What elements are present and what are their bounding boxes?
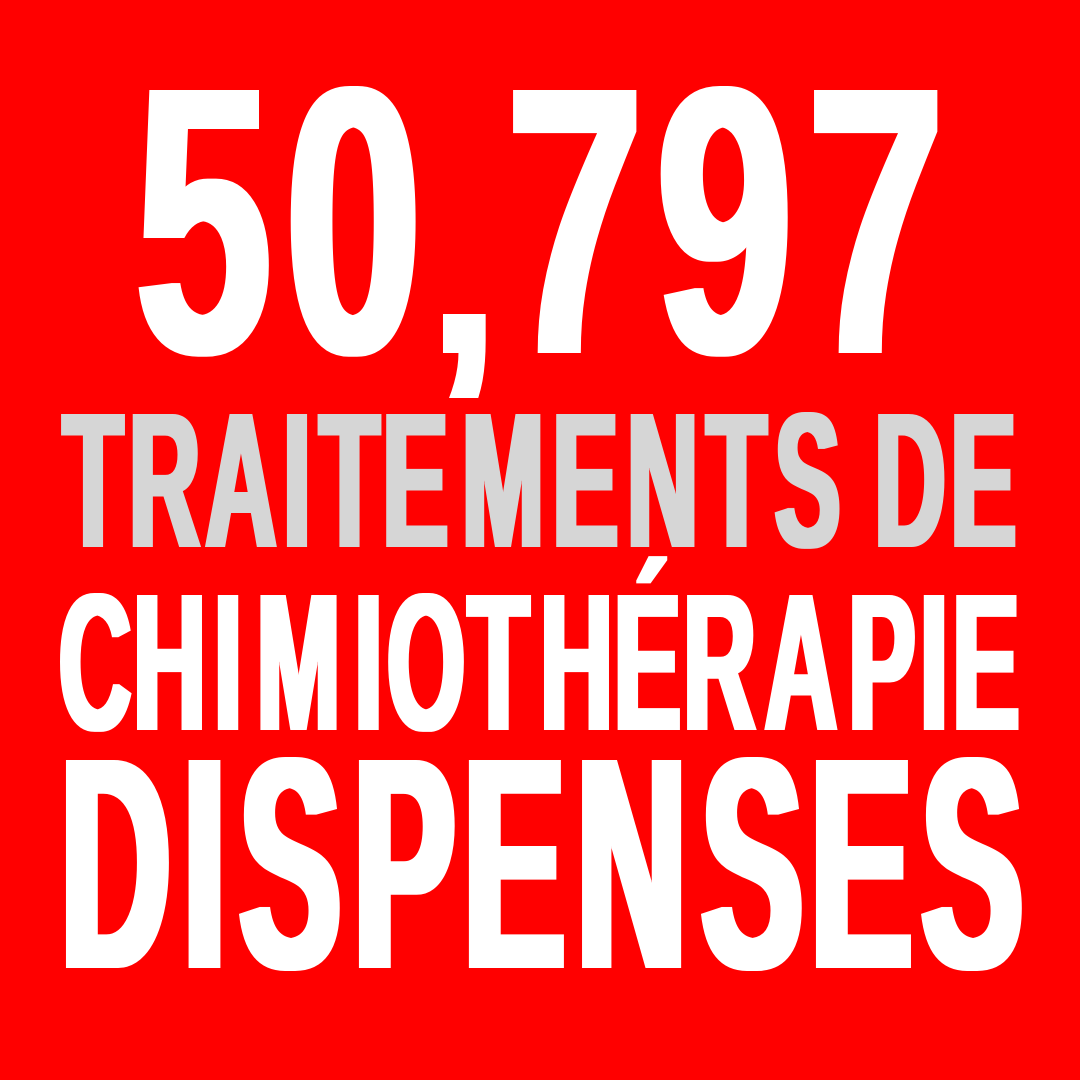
text line: dispenses: DISPENSES xyxy=(61,695,1023,1032)
text line: chimiothérapie: CHIMIOTHÉRAPIE xyxy=(59,554,1019,773)
text line: traitements de: TRAITEMENTS DE xyxy=(63,373,1016,589)
headline number: 50,797: 50,797 xyxy=(135,8,944,435)
